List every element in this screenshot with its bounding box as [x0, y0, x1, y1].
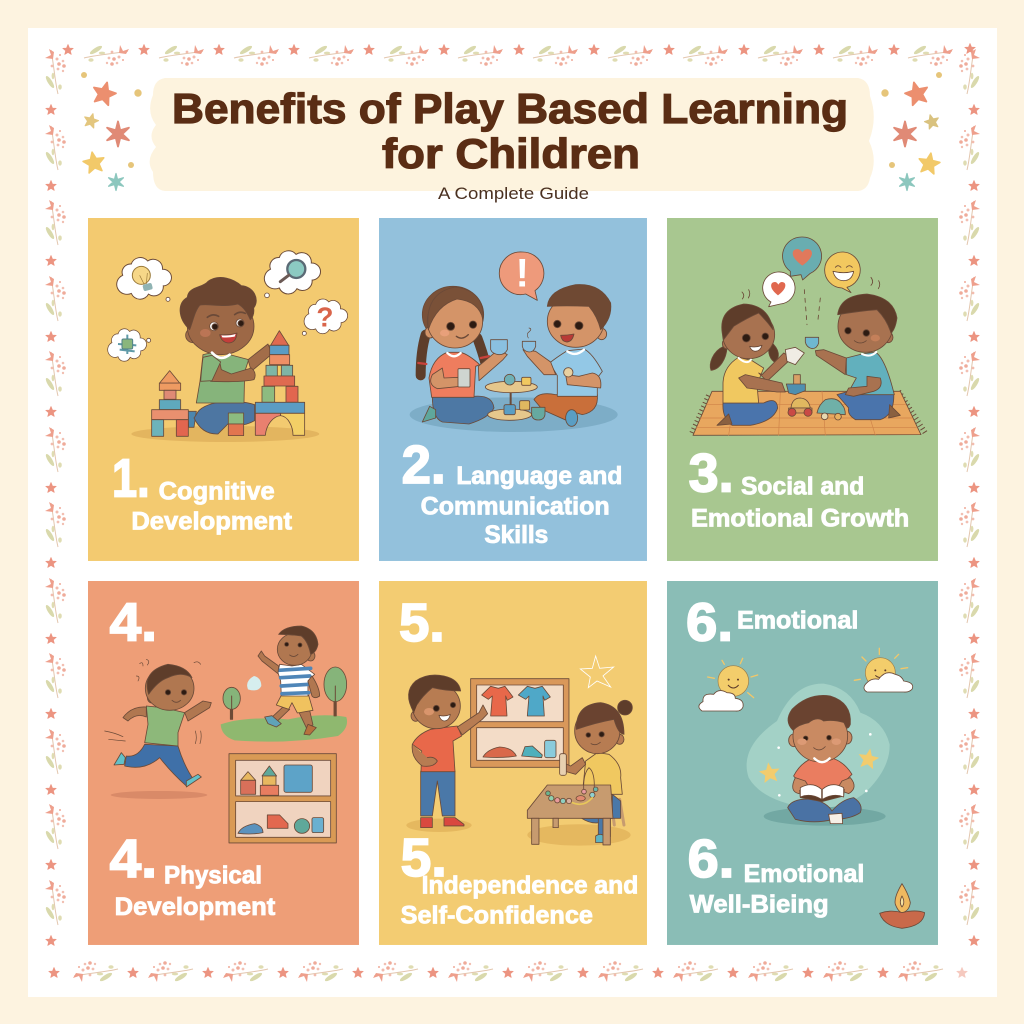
ground shadow [410, 397, 618, 432]
label 6 [686, 592, 864, 919]
label 4: 4. [110, 592, 157, 652]
bead string [546, 768, 598, 804]
girl at table [527, 700, 632, 845]
label 6: 6. [688, 829, 734, 889]
grass and trees [221, 667, 347, 742]
toy cars [786, 375, 845, 420]
glow stars [758, 733, 881, 797]
ground shadow [111, 791, 207, 799]
icon: diya lamp [880, 884, 925, 928]
title: Benefits of Play Based Learning [172, 85, 848, 132]
toy shelf [229, 754, 336, 843]
label 3: Social and [741, 474, 864, 501]
label 1: Cognitive [159, 479, 275, 506]
label 6: 6. [686, 592, 733, 652]
speech bubbles [742, 237, 880, 325]
sun and cloud: right [854, 648, 913, 692]
speech bubble [499, 251, 544, 300]
sun and cloud: left [699, 658, 758, 711]
panel 2: language and communication [379, 218, 647, 561]
label 2: Communication [421, 494, 610, 521]
label 3: Emotional Growth [691, 505, 909, 532]
speech bubble: ! [516, 251, 529, 295]
girl [418, 286, 507, 424]
label 2 [402, 435, 622, 549]
label 5 [399, 593, 638, 929]
title: for Children [382, 130, 640, 177]
label 2: Skills [484, 522, 548, 549]
label 2: 2. [402, 435, 446, 495]
title banner [150, 78, 874, 191]
label 1 [112, 448, 292, 536]
label 5: 5. [401, 828, 447, 888]
panel 1: cognitive development [88, 218, 359, 561]
boy [522, 285, 611, 426]
tea table [485, 374, 545, 420]
label 5: Independence and [422, 872, 638, 899]
label 3: 3. [689, 443, 734, 503]
label 1: Development [131, 509, 292, 536]
boy with blocks [152, 277, 305, 436]
boy [805, 294, 900, 420]
subtitle: A Complete Guide [438, 184, 589, 203]
title [172, 85, 848, 177]
standing boy [409, 675, 488, 828]
label 4: Development [115, 894, 275, 921]
reading boy [788, 695, 861, 824]
thought bubbles [108, 251, 348, 361]
label 6: Emotional [744, 861, 864, 888]
ground shadow [764, 807, 886, 826]
star cluster: right [881, 72, 942, 190]
panel 3: social and emotional growth [667, 218, 938, 561]
label 4: Physical [164, 863, 262, 890]
ground shadows [406, 819, 631, 846]
glow blob [747, 684, 890, 808]
panel 6: emotional well-being [667, 581, 938, 945]
label 1: 1. [112, 448, 150, 508]
thought bubbles: ? [316, 302, 334, 333]
label 6: Emotional [737, 607, 858, 634]
clothes shelf [471, 679, 569, 767]
label 5: Self-Confidence [401, 902, 593, 929]
playing boy [258, 626, 320, 735]
panel 5: independence and self-confidence [379, 581, 647, 945]
label 2: Language and [456, 463, 622, 490]
running boy [105, 659, 211, 787]
label 4 [110, 592, 275, 921]
label 3 [689, 443, 909, 532]
panel 4: physical development [88, 581, 359, 945]
star cluster: left [81, 72, 142, 190]
label 5: 5. [399, 593, 445, 653]
girl [710, 304, 804, 425]
ground shadow [131, 426, 319, 442]
rug [692, 391, 925, 435]
label 4: 4. [110, 829, 157, 889]
label 6: Well-Bieing [690, 892, 829, 919]
star outline [580, 656, 614, 688]
